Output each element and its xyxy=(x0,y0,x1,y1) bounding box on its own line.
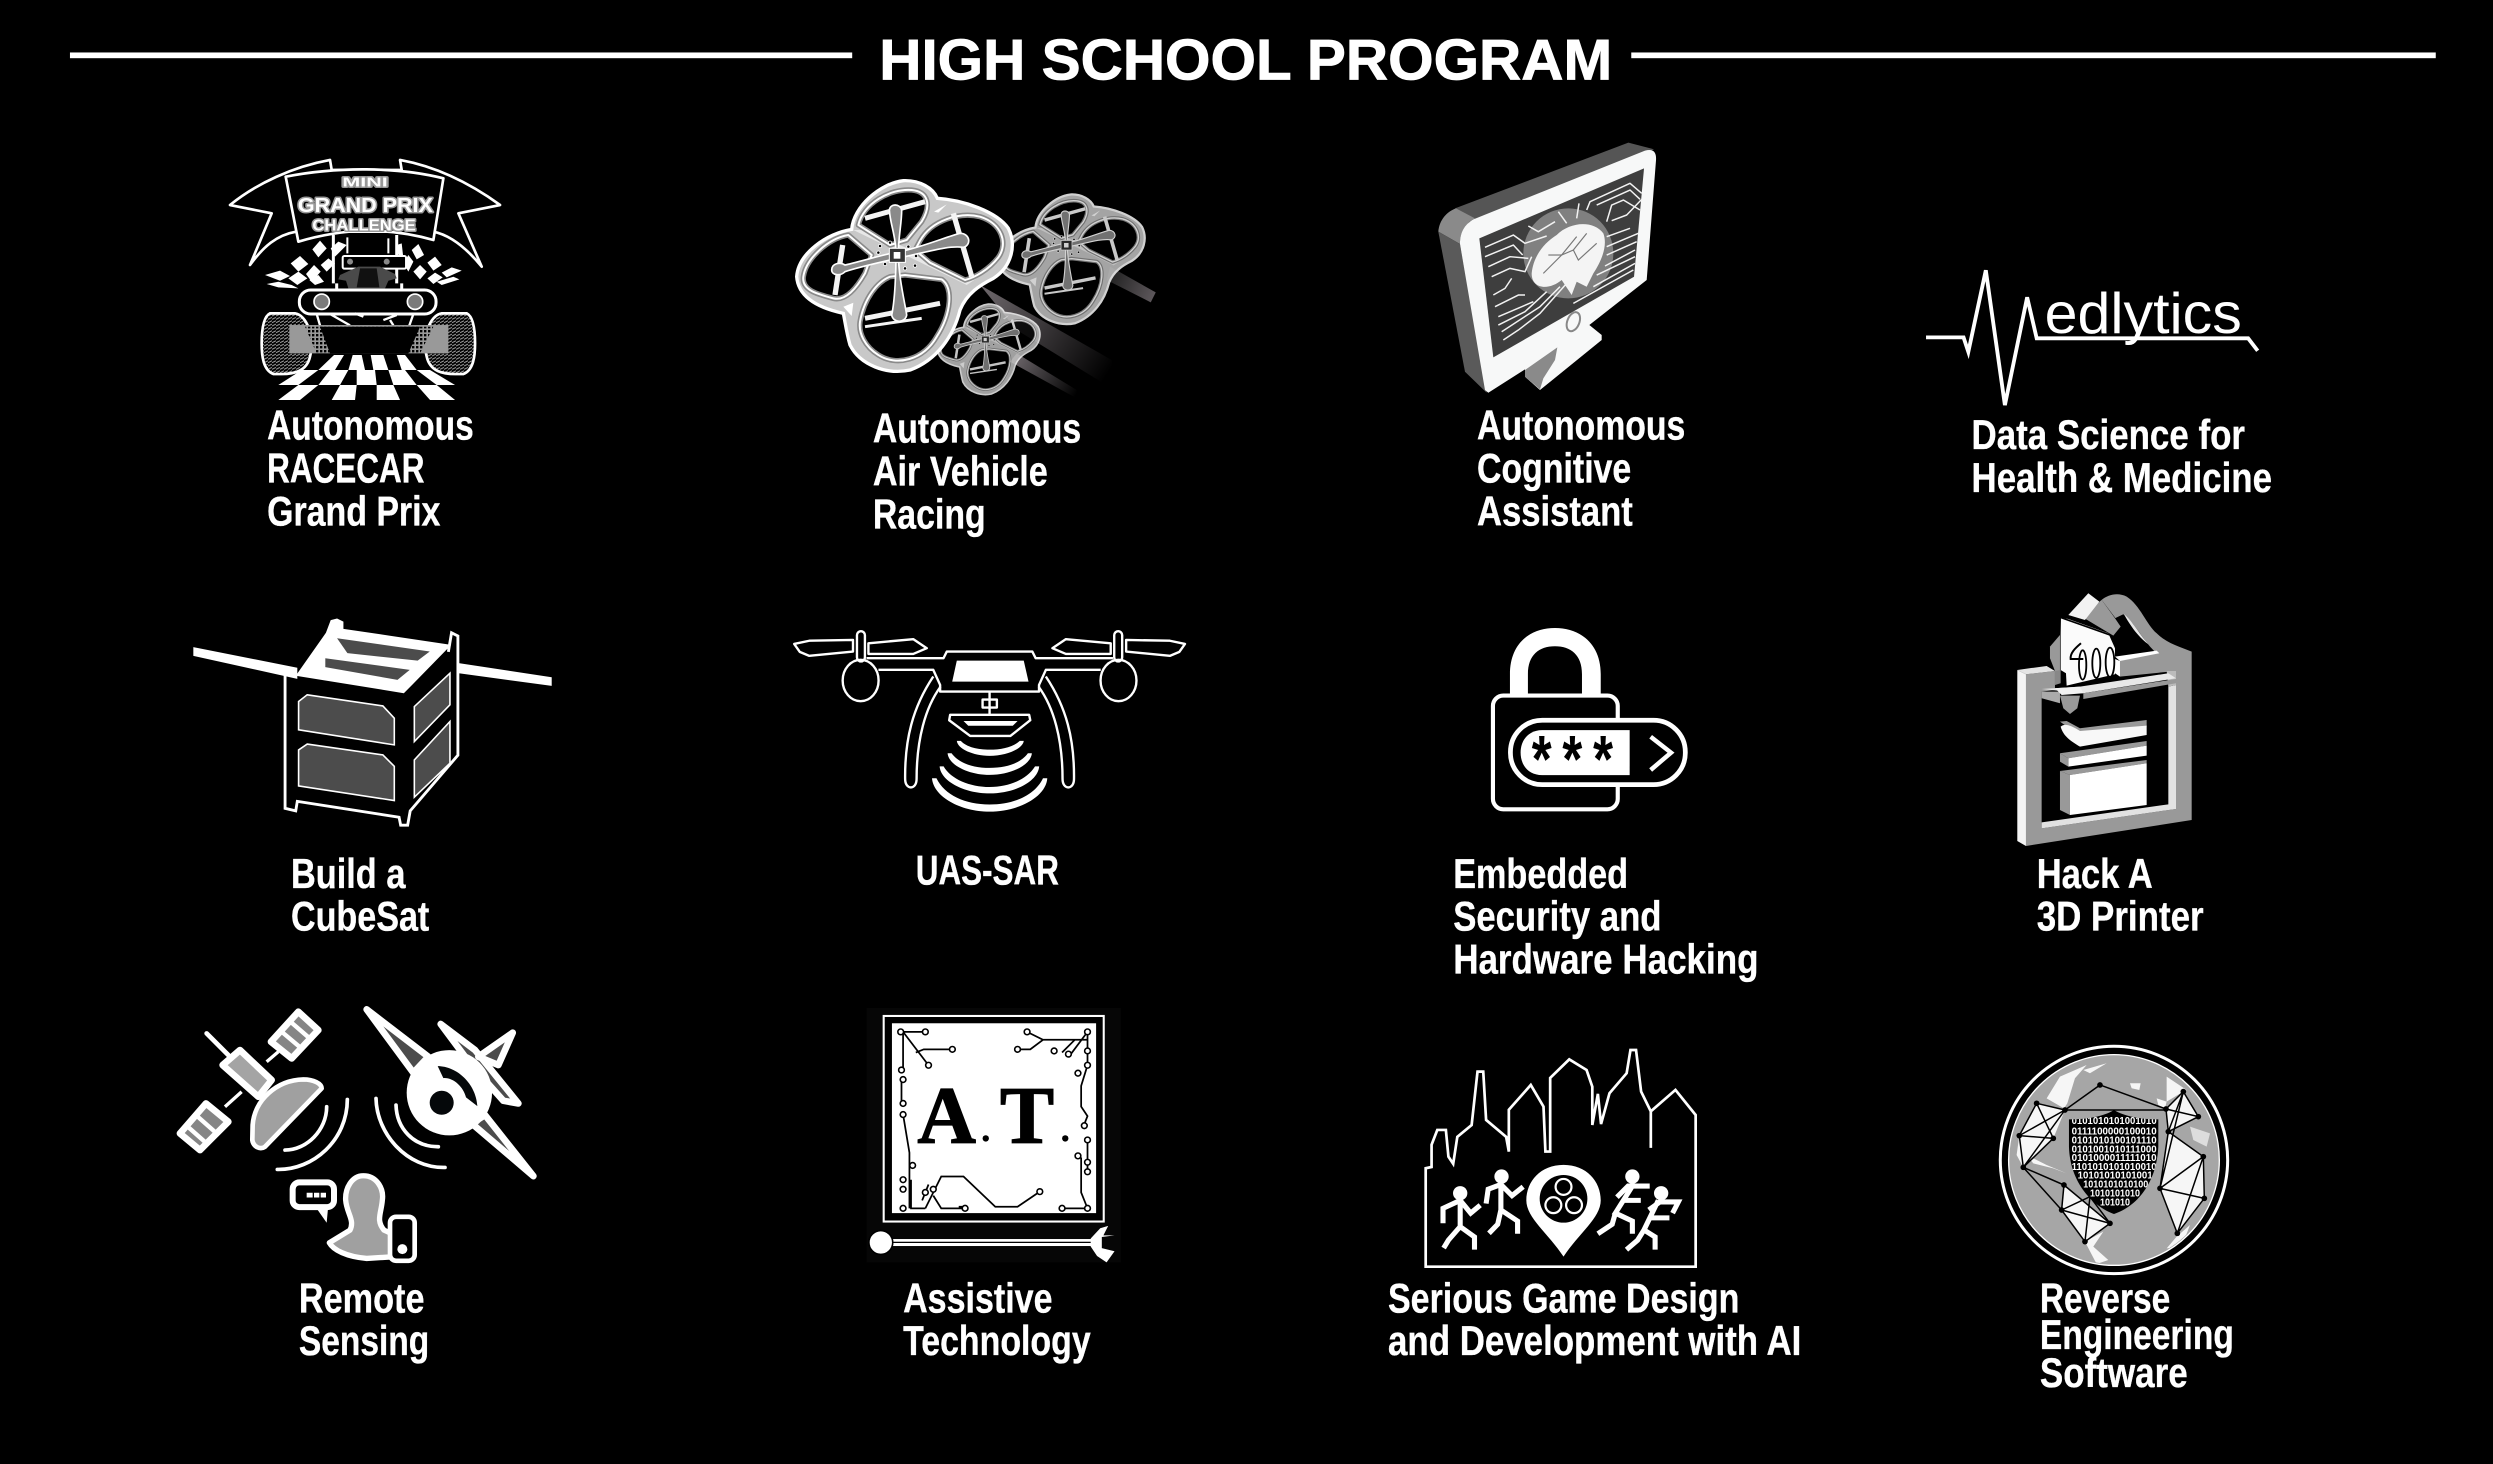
label: Reverse xyxy=(2040,1275,2170,1321)
label: Cognitive xyxy=(1477,445,1631,491)
label: Assistant xyxy=(1477,488,1633,534)
label: Security and xyxy=(1453,894,1661,940)
label xyxy=(2040,1275,2234,1396)
icon: A.T. circuit board and wrench xyxy=(867,1008,1121,1262)
icon: globe with binary shield and network: 0101000011111010 xyxy=(2072,1153,2157,1164)
label: Serious Game Design xyxy=(1388,1275,1739,1321)
icon: search and rescue drone xyxy=(794,631,1185,812)
icon: Medlytics logo xyxy=(1926,270,2258,405)
label: Autonomous xyxy=(873,406,1081,452)
panel: Reverse Engineering Software xyxy=(2000,1046,2234,1396)
panel: Serious Game Design and Development with AI xyxy=(1388,1050,1801,1364)
icon: A.T. circuit board and wrench: T xyxy=(1000,1071,1054,1161)
label xyxy=(267,402,474,534)
panel: Hack A 3D Printer xyxy=(2017,593,2204,940)
label xyxy=(299,1275,429,1364)
label: Air Vehicle xyxy=(873,449,1048,495)
panel: Embedded Security and Hardware Hacking xyxy=(1453,628,1758,983)
panel: Autonomous Air Vehicle Racing xyxy=(797,181,1156,537)
icon: globe with binary shield and network: 0111100000100010 xyxy=(2072,1126,2157,1137)
label: Hack A xyxy=(2037,851,2153,897)
icon: globe with binary shield and network: 0101010101001010 xyxy=(2072,1116,2157,1127)
label: UAS-SAR xyxy=(916,848,1059,894)
icon: padlock with password: *** xyxy=(1526,730,1619,806)
label: Racing xyxy=(873,491,986,537)
label xyxy=(1388,1275,1801,1364)
icon: monitor with brain xyxy=(1438,143,1656,393)
label: Software xyxy=(2040,1350,2188,1396)
icon: satellites and person xyxy=(180,1009,533,1261)
icon: racing drones xyxy=(797,181,1156,398)
panel: Build a CubeSat xyxy=(193,618,552,940)
label: Data Science for xyxy=(1972,412,2245,458)
icon: padlock with password xyxy=(1493,628,1685,809)
icon: globe with binary shield and network: 1010101010 xyxy=(2090,1189,2140,1200)
icon: city skyline with runners and biohazard pin xyxy=(1426,1050,1696,1267)
label: Sensing xyxy=(299,1318,429,1364)
label: CubeSat xyxy=(291,894,429,940)
label: RACECAR xyxy=(267,445,425,491)
icon: mini grand prix challenge race car xyxy=(230,160,500,400)
label xyxy=(873,406,1081,537)
panel: Autonomous RACECAR Grand Prix xyxy=(230,160,500,534)
title bar xyxy=(70,28,2436,92)
panel: Remote Sensing xyxy=(180,1009,533,1364)
icon: Medlytics logo: edlytics xyxy=(2045,282,2242,346)
label: Assistive xyxy=(903,1275,1053,1321)
label xyxy=(1453,851,1758,983)
label: Technology xyxy=(903,1318,1091,1364)
label xyxy=(1477,402,1685,534)
label: Hardware Hacking xyxy=(1453,937,1758,983)
icon: cubesat xyxy=(193,618,552,825)
label: Engineering xyxy=(2040,1312,2234,1358)
icon: mini grand prix challenge race car: MINI xyxy=(342,175,388,190)
label: and Development with AI xyxy=(1388,1318,1801,1364)
label xyxy=(291,851,429,940)
panel: Assistive Technology xyxy=(867,1008,1121,1364)
label: Autonomous xyxy=(1477,402,1685,448)
label: Health & Medicine xyxy=(1972,455,2272,501)
icon: globe with binary shield and network: 1010101010100 xyxy=(2083,1180,2148,1191)
panel: Data Science for Health & Medicine xyxy=(1926,270,2272,501)
icon: globe with binary shield and network: 1101010101010010 xyxy=(2072,1162,2157,1173)
label: Grand Prix xyxy=(267,488,440,534)
label xyxy=(2037,851,2204,940)
label: Embedded xyxy=(1453,851,1628,897)
title bar: HIGH SCHOOL PROGRAM xyxy=(879,28,1612,92)
icon: A.T. circuit board and wrench: A xyxy=(917,1071,976,1161)
icon: mini grand prix challenge race car: GRAND PRIX xyxy=(298,195,434,217)
label: 3D Printer xyxy=(2037,894,2204,940)
panel: UAS-SAR xyxy=(794,631,1185,894)
label xyxy=(1972,412,2272,501)
panel: Autonomous Cognitive Assistant xyxy=(1438,143,1685,534)
label: Remote xyxy=(299,1275,425,1321)
icon: 3D printer with hand xyxy=(2017,593,2192,846)
label: Build a xyxy=(291,851,406,897)
label xyxy=(903,1275,1091,1364)
icon: globe with binary shield and network: 0101010100101110 xyxy=(2072,1135,2157,1146)
icon: globe with binary shield and network: 0101001010111000 xyxy=(2072,1144,2157,1155)
icon: globe with binary shield and network xyxy=(2000,1046,2228,1274)
label: Autonomous xyxy=(267,402,474,448)
icon: globe with binary shield and network: 10101010101001 xyxy=(2078,1171,2153,1182)
icon: mini grand prix challenge race car: CHALLENGE xyxy=(312,217,416,234)
icon: globe with binary shield and network: 101010 xyxy=(2100,1198,2130,1209)
